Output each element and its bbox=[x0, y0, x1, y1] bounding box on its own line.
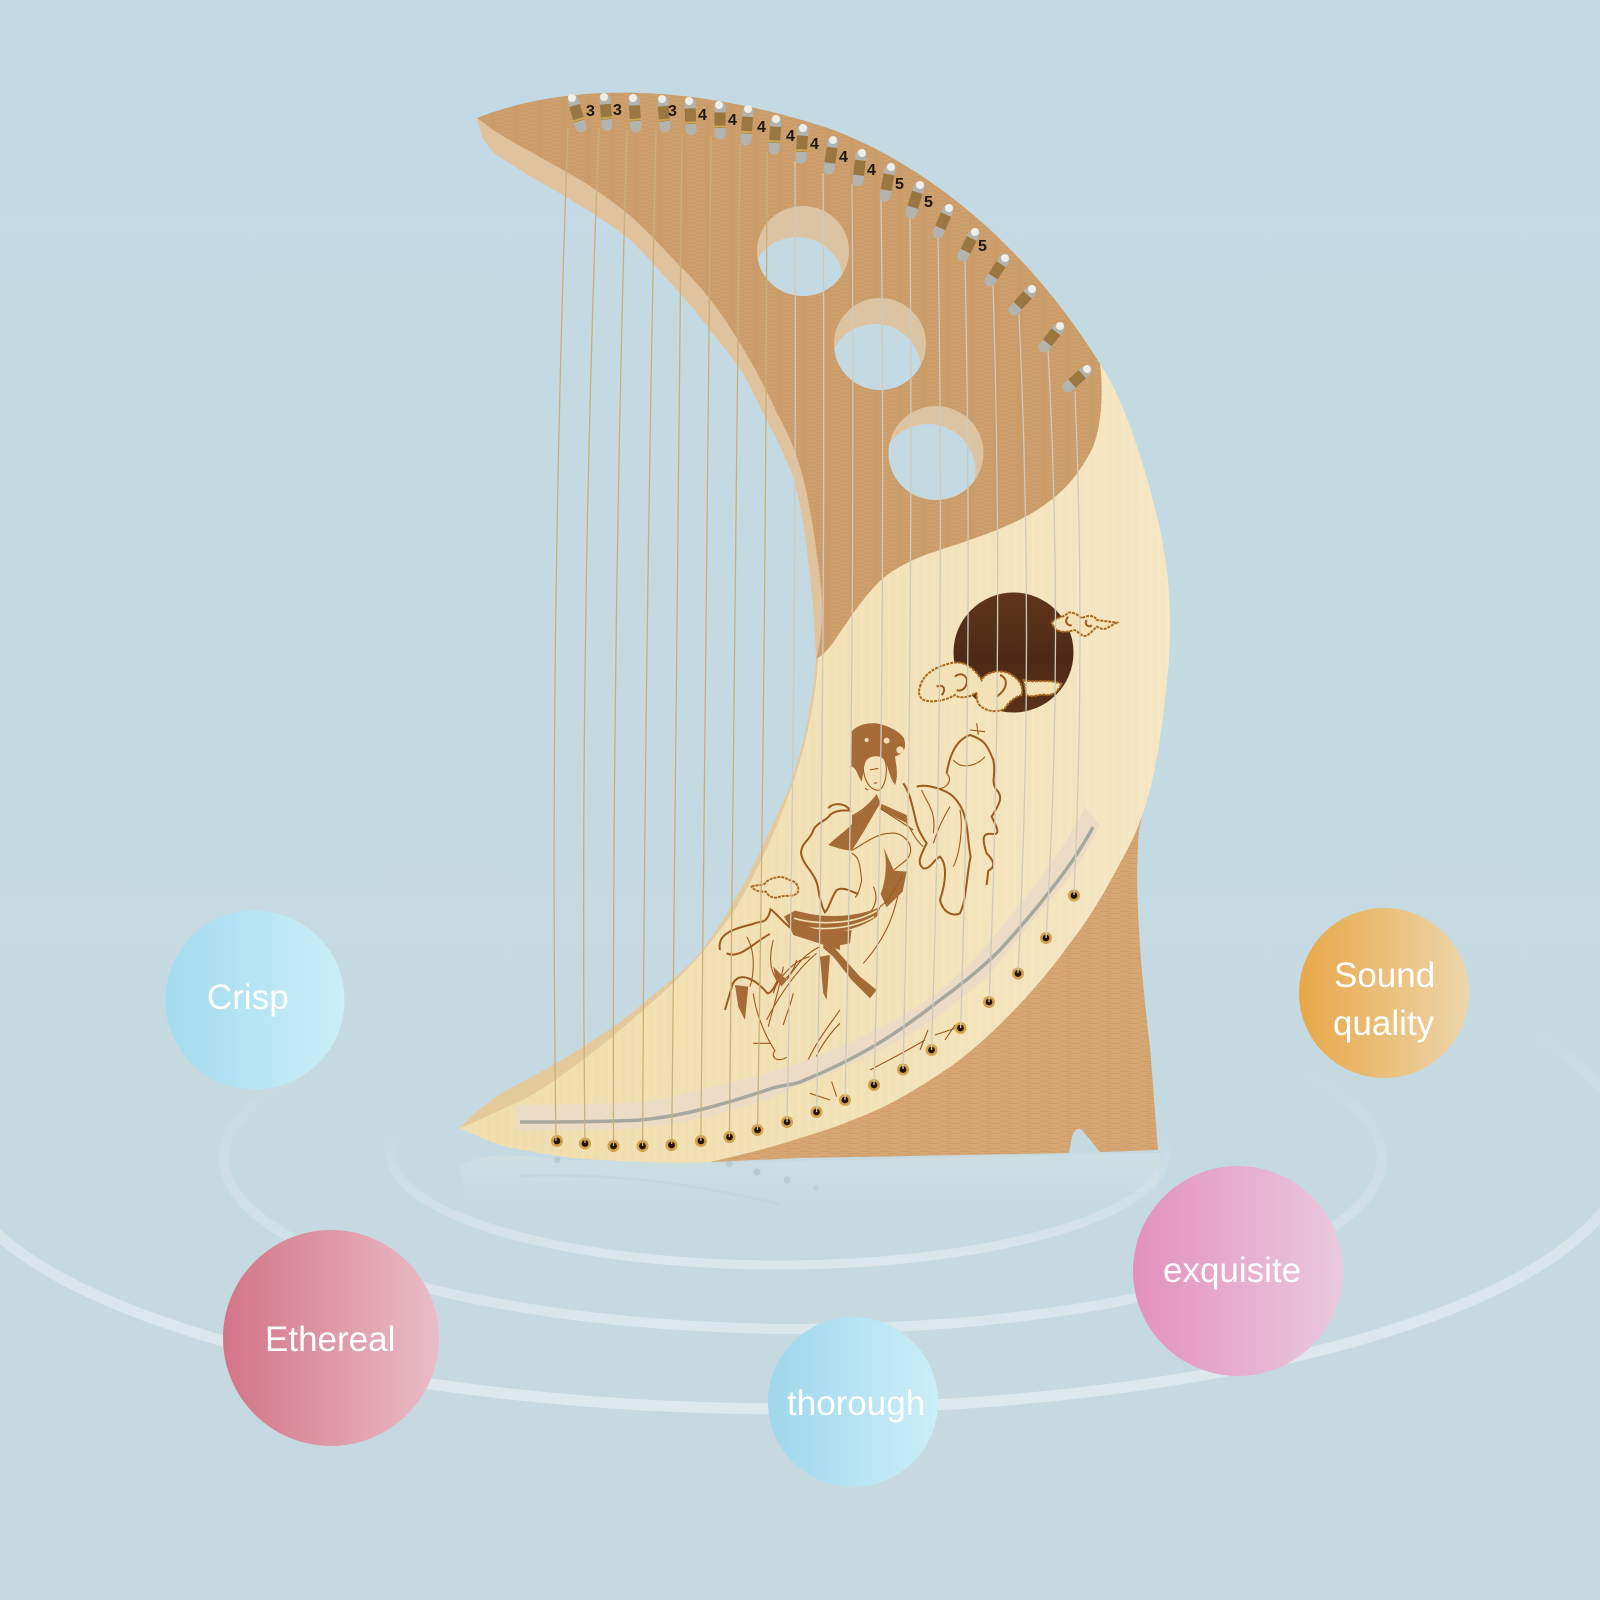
upper wood front face bbox=[477, 93, 1102, 659]
upper wood side face bbox=[477, 115, 835, 659]
engraved figure: skirt and small cloud bbox=[720, 877, 840, 1100]
badge: thorough bbox=[768, 1317, 938, 1487]
skirt dark folds bbox=[787, 920, 840, 950]
hanging sash bbox=[881, 847, 907, 907]
peg note numbers: 4 bbox=[786, 128, 795, 145]
tuning pegs bbox=[568, 93, 1091, 387]
peg note numbers: 4 bbox=[867, 162, 876, 179]
harp strings bbox=[554, 128, 1080, 1146]
peg note numbers: 4 bbox=[810, 136, 819, 153]
badge: Sound quality: Sound bbox=[1334, 956, 1435, 995]
harp stand base bbox=[710, 800, 1158, 1162]
peg note numbers: 3 bbox=[613, 102, 622, 119]
bridge strip bbox=[515, 807, 1100, 1131]
peg note numbers: 5 bbox=[924, 194, 933, 211]
chest band bbox=[880, 804, 908, 824]
badge: Sound quality bbox=[1299, 908, 1469, 1078]
badge: exquisite bbox=[1133, 1166, 1343, 1376]
badge: thorough: thorough bbox=[787, 1384, 925, 1423]
peg note numbers: 4 bbox=[728, 112, 737, 129]
lower crescent side face bbox=[460, 659, 840, 1135]
badge: Sound quality: quality bbox=[1333, 1004, 1435, 1043]
flower sprig bbox=[870, 1025, 965, 1070]
hair ornaments bbox=[865, 738, 904, 754]
peg note numbers: 5 bbox=[978, 238, 987, 255]
harp reflection bbox=[459, 1153, 1160, 1205]
hair bbox=[851, 723, 905, 785]
lyre harp bbox=[460, 93, 1170, 1163]
peg note numbers: 4 bbox=[698, 107, 707, 124]
small cloud bbox=[752, 877, 798, 898]
right scarf bbox=[947, 735, 1000, 885]
peg note numbers bbox=[586, 102, 987, 255]
peg note numbers: 4 bbox=[839, 149, 848, 166]
skirt outlines bbox=[720, 909, 793, 1010]
badge: Crisp: Crisp bbox=[207, 978, 289, 1017]
engraved moon bbox=[954, 592, 1074, 712]
metal rod bbox=[520, 827, 1093, 1122]
peg note numbers: 3 bbox=[668, 103, 677, 120]
badge: exquisite: exquisite bbox=[1163, 1251, 1301, 1290]
peg note numbers: 3 bbox=[586, 103, 595, 120]
face bbox=[863, 758, 886, 790]
engraved figure: upper body and scarf bbox=[784, 723, 1000, 998]
sound holes bbox=[751, 206, 984, 518]
concentric ripple rings bbox=[0, 987, 1600, 1409]
lower crescent front face bbox=[460, 364, 1170, 1163]
badge: Ethereal: Ethereal bbox=[265, 1320, 395, 1359]
engraved clouds bbox=[919, 613, 1117, 711]
lower dark panels bbox=[823, 930, 877, 998]
peg note numbers: 5 bbox=[895, 176, 904, 193]
left sleeve bbox=[801, 804, 858, 912]
arm and torso bbox=[852, 808, 923, 963]
peg note numbers: 4 bbox=[757, 119, 766, 136]
belt bands bbox=[784, 907, 881, 934]
badge: Crisp bbox=[166, 910, 344, 1090]
string anchor holes bbox=[551, 890, 1080, 1152]
badge: Ethereal bbox=[223, 1230, 439, 1446]
dark robe panel bbox=[828, 794, 881, 851]
